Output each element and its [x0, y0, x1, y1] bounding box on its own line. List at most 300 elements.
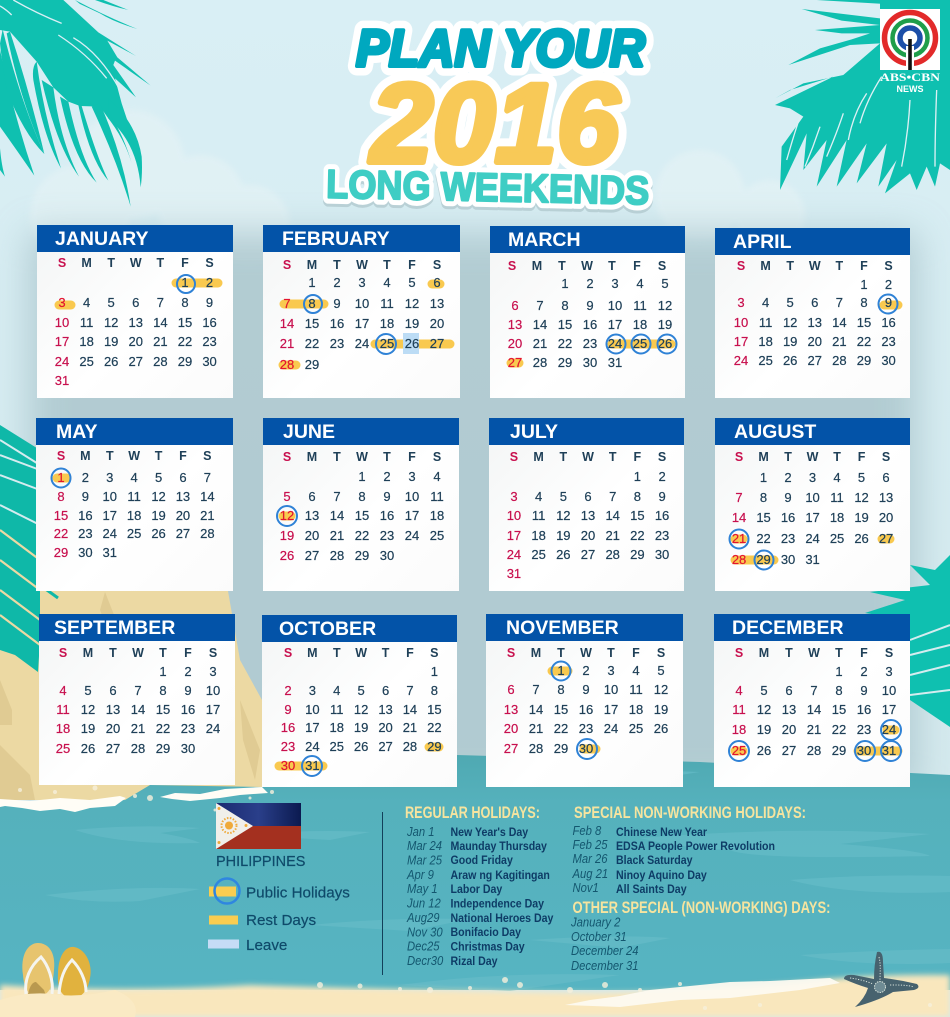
list: regular holiday dates: Nov 30 — [407, 925, 443, 940]
dates: August: 30 — [781, 552, 795, 567]
dates: March: 15 — [558, 317, 572, 332]
heading: April: APRIL — [733, 231, 792, 253]
dates: October: 18 — [330, 720, 344, 735]
dates: March: 22 — [558, 336, 572, 351]
dates: October: M — [307, 646, 318, 660]
dates: January: 5 — [108, 295, 115, 310]
dates: October: W — [355, 646, 367, 660]
dates: October: 31 — [305, 758, 320, 773]
dates: April: 12 — [783, 315, 797, 330]
panel: May — [36, 418, 233, 591]
list: regular holiday dates: Mar 25 — [407, 853, 442, 868]
dates: January: S — [58, 256, 66, 270]
dates: February: 27 — [430, 336, 444, 351]
dates: July: 9 — [658, 489, 666, 504]
title line: LONG WEEKENDS: LONG WEEKENDS — [326, 166, 650, 216]
dates: June: 11 — [430, 489, 444, 504]
dates: December: 24 — [882, 722, 896, 737]
dates: July: 28 — [605, 547, 620, 562]
dates: May: 20 — [176, 508, 190, 523]
dates: July: 18 — [531, 528, 546, 543]
dates: September: 15 — [156, 702, 170, 717]
logo: ABS-CBN News — [880, 9, 941, 94]
dates: November: 30 — [579, 741, 593, 756]
dates: December: 4 — [735, 683, 743, 698]
dates: March: 30 — [583, 355, 597, 370]
dates: May: 2 — [82, 470, 89, 485]
panel: November — [486, 614, 683, 787]
dates: October: 14 — [403, 702, 417, 717]
dates: June: 28 — [330, 548, 344, 563]
dates: September: 6 — [109, 683, 117, 698]
dates: March: 10 — [608, 298, 622, 313]
list: special holiday names — [616, 826, 775, 896]
dates: January: T — [107, 256, 115, 270]
dates: November: M — [531, 646, 541, 660]
dates: September: 7 — [134, 683, 142, 698]
dates: August: S — [882, 450, 890, 464]
dates: October: 5 — [358, 683, 365, 698]
holiday circles: May — [50, 468, 72, 488]
dates: February: 3 — [358, 275, 366, 290]
dates: December: 29 — [832, 743, 846, 758]
dates: April: M — [760, 259, 771, 273]
dates: April: 9 — [885, 295, 892, 310]
dates: May: 21 — [200, 508, 215, 523]
list: other special days — [570, 915, 639, 973]
dates: October: 22 — [427, 720, 442, 735]
legend: rest days — [209, 912, 316, 929]
dates: June: T — [333, 450, 341, 464]
list: special holiday dates: Feb 8 — [572, 823, 602, 838]
dates: March: 12 — [658, 298, 672, 313]
dates: February — [280, 258, 444, 372]
dates: December: 10 — [882, 683, 896, 698]
dates: November: 24 — [604, 721, 618, 736]
dates: August: 14 — [732, 510, 746, 525]
dates: May — [54, 449, 215, 560]
dates: November: 18 — [629, 702, 643, 717]
dates: March: 2 — [586, 276, 594, 291]
dates: November: 11 — [629, 682, 643, 697]
dates: September: 22 — [156, 721, 170, 736]
heading: November: NOVEMBER — [506, 617, 619, 639]
dates: January: 22 — [178, 334, 192, 349]
dates: March — [508, 259, 672, 370]
heading: January: JANUARY — [55, 228, 149, 250]
dates: February: 19 — [405, 316, 419, 331]
heading: May: MAY — [56, 421, 98, 443]
dates: February: 4 — [383, 275, 391, 290]
rest and leave marks: February — [278, 280, 454, 370]
foam — [0, 796, 126, 812]
dates: June: 1 — [358, 469, 366, 484]
dates: May: 12 — [151, 489, 166, 504]
dates: March: 17 — [608, 317, 622, 332]
dates: March: 9 — [586, 298, 594, 313]
dates: June: 20 — [305, 528, 319, 543]
dates: March: M — [532, 259, 542, 273]
dates: January: 7 — [157, 295, 164, 310]
dates: May: 14 — [200, 489, 215, 504]
dates: March: F — [633, 259, 641, 273]
dates: January: 28 — [153, 354, 168, 369]
dates: May: 18 — [127, 508, 141, 523]
dates: July: 11 — [532, 508, 545, 523]
dates: September: 23 — [181, 721, 195, 736]
dates: July: 20 — [581, 528, 595, 543]
dates: September: 29 — [156, 741, 170, 756]
list: special holiday dates: Mar 26 — [572, 851, 608, 866]
dates: May: 31 — [103, 545, 117, 560]
dates: May: 6 — [179, 470, 187, 485]
dates: January: 4 — [83, 295, 90, 310]
list: special holiday names: Ninoy Aquino Day — [616, 869, 707, 882]
dates: January — [55, 256, 217, 388]
dates: November: 20 — [504, 721, 518, 736]
panel: October — [262, 615, 457, 787]
holiday circles: February — [303, 294, 397, 355]
dates: May: 30 — [78, 545, 93, 560]
dates: July: 13 — [581, 508, 595, 523]
rest day marks: June — [278, 512, 296, 520]
dates: September: 18 — [56, 721, 70, 736]
dates: November: 28 — [529, 741, 543, 756]
dates: June: 2 — [383, 469, 391, 484]
dates: October: 20 — [378, 720, 393, 735]
holiday circles: October — [301, 755, 323, 777]
legend heading: Philippines: PHILIPPINES — [216, 854, 305, 870]
dates: April: S — [737, 259, 745, 273]
list: regular holiday names: National Heroes Day — [450, 912, 554, 925]
dates: April: 1 — [860, 277, 868, 292]
dates: November: 3 — [607, 663, 615, 678]
dates: November — [504, 646, 668, 756]
dates: January: 18 — [79, 334, 94, 349]
dates: September: 5 — [84, 683, 92, 698]
dates: October: 24 — [305, 739, 320, 754]
dates: June: 26 — [280, 548, 294, 563]
dates: April: 3 — [737, 295, 745, 310]
dates: September — [56, 646, 220, 756]
dates: February: 7 — [283, 296, 291, 311]
holiday circles: December — [728, 719, 902, 762]
dates: August: 25 — [830, 531, 844, 546]
dates: June: 16 — [380, 508, 394, 523]
dates: November: 17 — [604, 702, 618, 717]
dates: November: 1 — [557, 663, 565, 678]
dates: May: T — [106, 449, 114, 463]
legend: leave — [208, 937, 287, 954]
dates: November: 15 — [554, 702, 568, 717]
dates: October: T — [333, 646, 341, 660]
dates: July: 24 — [507, 547, 521, 562]
heading: May — [36, 418, 233, 445]
dates: August: 26 — [854, 531, 869, 546]
dates: March: 31 — [608, 355, 622, 370]
dates: December: 6 — [785, 683, 793, 698]
dates: August: 18 — [830, 510, 844, 525]
dates: July: 27 — [581, 547, 595, 562]
heading: other special days: OTHER SPECIAL (NON-WORKING) DAYS: — [572, 899, 830, 917]
list: regular holiday dates: Decr30 — [407, 953, 444, 968]
dates: May: 7 — [204, 470, 211, 485]
holiday circles: April — [878, 294, 898, 314]
dates: April: 21 — [832, 334, 847, 349]
dates: July: 6 — [584, 489, 592, 504]
dates: July: 25 — [531, 547, 546, 562]
dates: December: 12 — [757, 702, 771, 717]
dates: September: S — [209, 646, 217, 660]
dates: February: 11 — [380, 296, 394, 311]
dates: October: 7 — [406, 683, 414, 698]
panel: January — [37, 225, 233, 398]
dates: April: 27 — [808, 353, 822, 368]
dates: April: 25 — [758, 353, 773, 368]
dates: June: 3 — [408, 469, 416, 484]
panel: July — [489, 418, 684, 591]
dates: September: 3 — [209, 664, 217, 679]
dates: February: 14 — [280, 316, 294, 331]
dates: November: 10 — [604, 682, 618, 697]
dates: June: 13 — [305, 508, 319, 523]
dates: March: 23 — [583, 336, 597, 351]
dates: May: 28 — [200, 526, 215, 541]
dates: May: 23 — [78, 526, 93, 541]
dates: October: 4 — [333, 683, 340, 698]
dates: October: 12 — [354, 702, 368, 717]
dates: October: 26 — [354, 739, 368, 754]
dates: December: 30 — [857, 743, 871, 758]
dates: January: 20 — [129, 334, 143, 349]
dates: December: 25 — [732, 743, 746, 758]
dates: August: 21 — [732, 531, 746, 546]
dates: March: 29 — [558, 355, 572, 370]
dates: February: 13 — [430, 296, 444, 311]
dates: May: 13 — [176, 489, 190, 504]
dates: March: 14 — [533, 317, 547, 332]
dates: March: S — [508, 259, 516, 273]
dates: September: 8 — [159, 683, 167, 698]
dates: April: W — [809, 259, 821, 273]
dates: July: T — [609, 450, 616, 464]
dates: May: 8 — [57, 489, 65, 504]
dates: December: 17 — [882, 702, 896, 717]
dates: February: 28 — [280, 357, 294, 372]
dates: January: 21 — [153, 334, 168, 349]
dates: August: 4 — [833, 470, 841, 485]
dates: February: F — [408, 258, 416, 272]
dates: January: 6 — [132, 295, 139, 310]
dates: April: 8 — [860, 295, 868, 310]
dates: November: 25 — [629, 721, 643, 736]
dates: October: S — [430, 646, 438, 660]
dates: March: S — [658, 259, 666, 273]
legend: public holidays: Public Holidays — [246, 884, 350, 902]
dates: January: 17 — [55, 334, 69, 349]
dates: November: 7 — [532, 682, 540, 697]
dates: December: 21 — [807, 722, 821, 737]
list: special holiday names: EDSA People Power Revolution — [616, 840, 775, 853]
dates: November: S — [657, 646, 665, 660]
dates: June: 5 — [283, 489, 291, 504]
dates: April: F — [860, 259, 868, 273]
dates: May: 26 — [151, 526, 166, 541]
dates: September: S — [59, 646, 67, 660]
dates: July: 7 — [609, 489, 616, 504]
dates: February: 26 — [405, 336, 419, 351]
dates: August: 12 — [854, 490, 869, 505]
dates: August: 2 — [784, 470, 792, 485]
dates: April: 30 — [881, 353, 896, 368]
list: special holiday dates: Nov1 — [572, 880, 599, 895]
dates: October: 27 — [378, 739, 393, 754]
title line: LONG WEEKENDS: LONG WEEKENDS — [326, 163, 650, 213]
dates: March: 21 — [533, 336, 547, 351]
dates: June: 14 — [330, 508, 344, 523]
heading: September — [39, 614, 235, 641]
dates: October: T — [382, 646, 389, 660]
dates: August: 7 — [735, 490, 743, 505]
panel: April — [715, 228, 910, 398]
dates: August: 13 — [879, 490, 893, 505]
dates: December: S — [885, 646, 893, 660]
dates: June — [280, 450, 444, 563]
title line: LONG WEEKENDS: LONG WEEKENDS — [326, 163, 650, 213]
heading: July: JULY — [510, 421, 558, 443]
dates: June: 7 — [333, 489, 341, 504]
dates: May: S — [203, 449, 212, 463]
dates: September: W — [132, 646, 144, 660]
list: regular holiday dates: Mar 24 — [407, 838, 442, 853]
dates: April: 15 — [857, 315, 871, 330]
heading: June: JUNE — [283, 421, 335, 443]
heading: December: DECEMBER — [732, 617, 844, 639]
dates: June: 30 — [380, 548, 394, 563]
dates: January: 23 — [202, 334, 217, 349]
dates: December: 1 — [835, 664, 843, 679]
list: regular holiday dates: May 1 — [407, 881, 438, 896]
dates: September: 20 — [106, 721, 120, 736]
dates: September: 21 — [131, 721, 145, 736]
legend: leave: Leave — [246, 937, 287, 954]
dates: February: 17 — [355, 316, 369, 331]
dates: July: W — [582, 450, 594, 464]
list: other special days: December 24 — [571, 943, 639, 958]
dates: April: 5 — [787, 295, 794, 310]
dates: May: 11 — [127, 489, 141, 504]
dates: March: 20 — [508, 336, 522, 351]
dates: November: 23 — [579, 721, 593, 736]
dates: August: 16 — [781, 510, 795, 525]
dates: June: S — [283, 450, 291, 464]
dates: March: 24 — [608, 336, 622, 351]
list: other special days: December 31 — [571, 958, 638, 973]
dates: March: 27 — [508, 355, 522, 370]
holiday circles: January — [176, 274, 196, 294]
dates: June: 6 — [308, 489, 316, 504]
rest day marks: May — [52, 474, 72, 482]
dates: May: 17 — [103, 508, 117, 523]
dates: August: 19 — [854, 510, 869, 525]
dates: April: 19 — [783, 334, 797, 349]
dates: December: 27 — [782, 743, 796, 758]
dates: August: 15 — [756, 510, 771, 525]
list: regular holiday names: Good Friday — [450, 854, 513, 867]
dates: December: W — [808, 646, 820, 660]
legend: rest days: Rest Days — [246, 912, 316, 929]
dates: February: S — [433, 258, 441, 272]
dates: October — [281, 646, 442, 773]
dates: May: 4 — [131, 470, 138, 485]
dates: March: 3 — [611, 276, 619, 291]
title line: 2016: 2016 — [369, 61, 620, 186]
dates: January: 31 — [55, 373, 69, 388]
heading: July — [489, 418, 684, 445]
dates: June: 24 — [405, 528, 419, 543]
dates: October: F — [406, 646, 414, 660]
dates: September: 2 — [184, 664, 192, 679]
icon: Philippine flag — [216, 803, 301, 849]
dates: February: 24 — [355, 336, 369, 351]
dates: September: 12 — [81, 702, 95, 717]
dates: March: 26 — [658, 336, 672, 351]
palm: left middle — [0, 425, 58, 672]
dates: November: F — [632, 646, 640, 660]
dates: February: 25 — [380, 336, 394, 351]
dates: December — [732, 646, 896, 758]
dates: June: T — [383, 450, 391, 464]
dates: May: 3 — [106, 470, 113, 485]
dates: August: 10 — [805, 490, 820, 505]
dates: September: 17 — [206, 702, 220, 717]
dates: November: 14 — [529, 702, 543, 717]
dates: April: 4 — [762, 295, 769, 310]
dates: March: 1 — [561, 276, 569, 291]
palm: top left — [0, 0, 151, 207]
dates: February: 9 — [333, 296, 341, 311]
title line: PLAN YOUR: PLAN YOUR — [356, 20, 645, 78]
dates: January: 16 — [202, 315, 217, 330]
dates: August: 20 — [879, 510, 893, 525]
dates: December: T — [785, 646, 793, 660]
dates: September: T — [159, 646, 167, 660]
dates: June: 9 — [383, 489, 391, 504]
list: regular holiday names: Araw ng Kagitingan — [450, 869, 550, 882]
dates: January: 10 — [55, 315, 69, 330]
heading: December — [714, 614, 910, 641]
panel: September — [39, 614, 235, 785]
dates: February: 10 — [355, 296, 369, 311]
dates: February: 1 — [308, 275, 316, 290]
dates: September: F — [184, 646, 192, 660]
dates: November: 19 — [654, 702, 668, 717]
dates: August: 3 — [809, 470, 816, 485]
dates: June: 17 — [405, 508, 419, 523]
dates: September: 28 — [131, 741, 145, 756]
dates: December: 7 — [810, 683, 818, 698]
dates: April: 16 — [881, 315, 896, 330]
dates: December: 5 — [760, 683, 768, 698]
dates: February: 15 — [305, 316, 319, 331]
rest day marks: November — [548, 666, 600, 754]
dates: December: 22 — [832, 722, 846, 737]
bottom beach — [0, 975, 950, 1017]
icon: starfish — [844, 952, 918, 1007]
dates: October: 1 — [431, 664, 438, 679]
dates: March: 4 — [636, 276, 644, 291]
dates: March: 28 — [533, 355, 547, 370]
